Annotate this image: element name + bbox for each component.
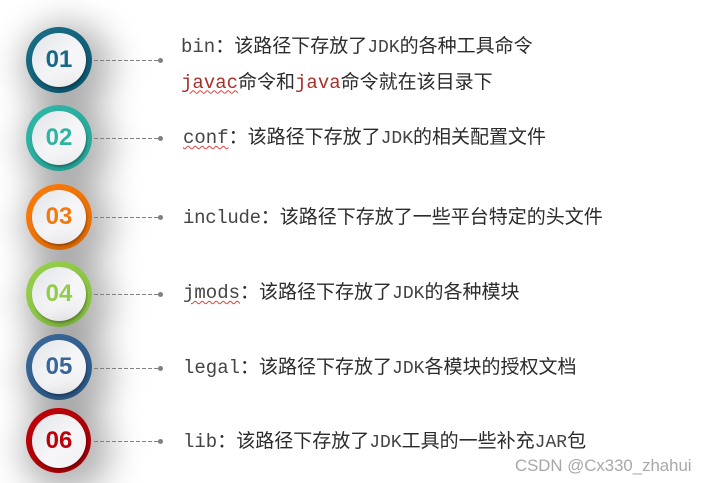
badge 06: 06 <box>46 427 72 454</box>
text: bin description <box>181 36 533 94</box>
text: lib description: lib：该路径下存放了JDK工具的一些补充JAR包 <box>183 431 586 453</box>
connector 04 <box>94 294 159 295</box>
text: jmods description: jmods：该路径下存放了JDK的各种模块 <box>183 282 519 304</box>
connector dot 04 <box>158 292 163 297</box>
text: conf description: conf：该路径下存放了JDK的相关配置文件 <box>183 127 546 149</box>
text: bin description: bin：该路径下存放了JDK的各种工具命令 <box>181 36 533 58</box>
badge 04: 04 <box>46 280 72 307</box>
watermark: CSDN @Cx330_zhahui <box>515 456 692 475</box>
text: include description: include：该路径下存放了一些平台特定的头文件 <box>183 207 603 229</box>
badge 01 <box>26 27 92 93</box>
badge 02 <box>26 105 92 171</box>
text: legal description: legal：该路径下存放了JDK各模块的授权文档 <box>183 357 576 379</box>
connector 02 <box>94 138 159 139</box>
badge 05: 05 <box>46 353 72 380</box>
connector 06 <box>94 441 159 442</box>
connector dot 06 <box>158 439 163 444</box>
connector dot 03 <box>158 215 163 220</box>
badge 01: 01 <box>46 46 72 73</box>
connector dot 01 <box>158 58 163 63</box>
connector dot 05 <box>158 366 163 371</box>
badge 05 <box>26 334 92 400</box>
badge 04 <box>26 261 92 327</box>
connector 01 <box>94 60 159 61</box>
connector 05 <box>94 368 159 369</box>
badge 03 <box>26 184 92 250</box>
badge 02: 02 <box>46 124 72 151</box>
connector 03 <box>94 217 159 218</box>
connector dot 02 <box>158 136 163 141</box>
text: bin description: javac命令和java命令就在该目录下 <box>181 72 493 94</box>
badge 03: 03 <box>46 203 72 230</box>
badge 06 <box>26 408 91 473</box>
